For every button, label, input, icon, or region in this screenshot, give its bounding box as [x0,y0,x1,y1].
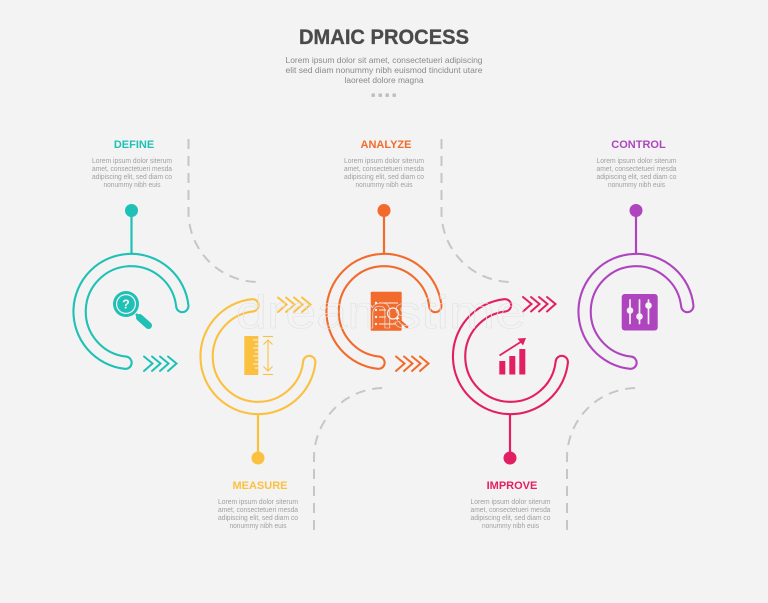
control text: adipiscing elit, sed diam co [596,174,677,181]
icon: magnifier with question mark [113,291,148,326]
watermark: dreamstime [236,286,526,338]
panel: measure [207,298,310,530]
panel: control [585,139,687,363]
measure text: nonummy nibh euis [230,523,287,530]
dashed connector 4 [567,388,637,530]
analyze pin [378,204,390,255]
define pin [125,204,138,255]
subtitle: elit sed diam nonummy nibh euismod tincidunt utare [286,65,483,75]
define text: amet, consectetueri mesda [92,166,172,173]
define text [92,158,172,189]
arrows: define chevrons [144,356,176,371]
icon: ruler with arrow [244,336,273,375]
control ring [585,260,687,363]
improve ring [459,305,562,408]
define ring [80,260,182,363]
measure pin [252,414,264,464]
define text: nonummy nibh euis [104,182,161,189]
subtitle: laoreet dolore magna [344,75,424,85]
header [286,25,483,97]
improve text: nonummy nibh euis [482,523,539,530]
analyze text: nonummy nibh euis [356,182,413,189]
improve pin [504,414,516,464]
icon: magnifier with question mark: ? [122,298,130,312]
icon: sliders [622,294,658,330]
arrows: measure chevrons [278,298,310,312]
panel: analyze [333,139,435,371]
improve text: Lorem ipsum dolor siterum [470,499,551,506]
improve heading: IMPROVE [487,480,537,492]
subtitle [286,55,483,85]
control text: amet, consectetueri mesda [596,166,677,173]
arrows: improve chevrons [523,297,556,312]
title: DMAIC PROCESS [299,25,469,49]
measure text: adipiscing elit, sed diam co [218,515,298,522]
analyze heading: ANALYZE [361,139,411,151]
define text: Lorem ipsum dolor siterum [92,158,172,165]
analyze ring [333,260,435,363]
measure text: amet, consectetueri mesda [218,507,298,514]
analyze text: adipiscing elit, sed diam co [344,174,424,181]
measure heading: MEASURE [232,480,288,492]
measure text [218,499,298,530]
dashed connector 2 [442,139,512,282]
control heading: CONTROL [611,139,666,151]
arrows: analyze chevrons [396,356,428,371]
panel: improve [459,297,562,530]
analyze text: Lorem ipsum dolor siterum [344,158,424,165]
improve text: adipiscing elit, sed diam co [470,515,551,522]
define text: adipiscing elit, sed diam co [92,174,172,181]
measure text: Lorem ipsum dolor siterum [218,499,298,506]
analyze text [344,158,424,189]
measure ring [207,305,309,408]
subtitle: Lorem ipsum dolor sit amet, consectetueri adipiscing [286,55,483,65]
dashed connector 3 [314,388,384,530]
header dots [372,94,396,97]
panel: define [80,139,182,371]
control text: Lorem ipsum dolor siterum [596,158,677,165]
icon: rising bar chart [499,338,526,374]
dashed connector 1 [188,139,258,282]
control text [596,158,677,189]
improve text: amet, consectetueri mesda [470,507,551,514]
control pin [630,204,642,255]
define heading: DEFINE [114,139,154,151]
icon: document with magnifier [371,292,407,331]
improve text [470,499,551,530]
control text: nonummy nibh euis [608,182,665,189]
analyze text: amet, consectetueri mesda [344,166,424,173]
